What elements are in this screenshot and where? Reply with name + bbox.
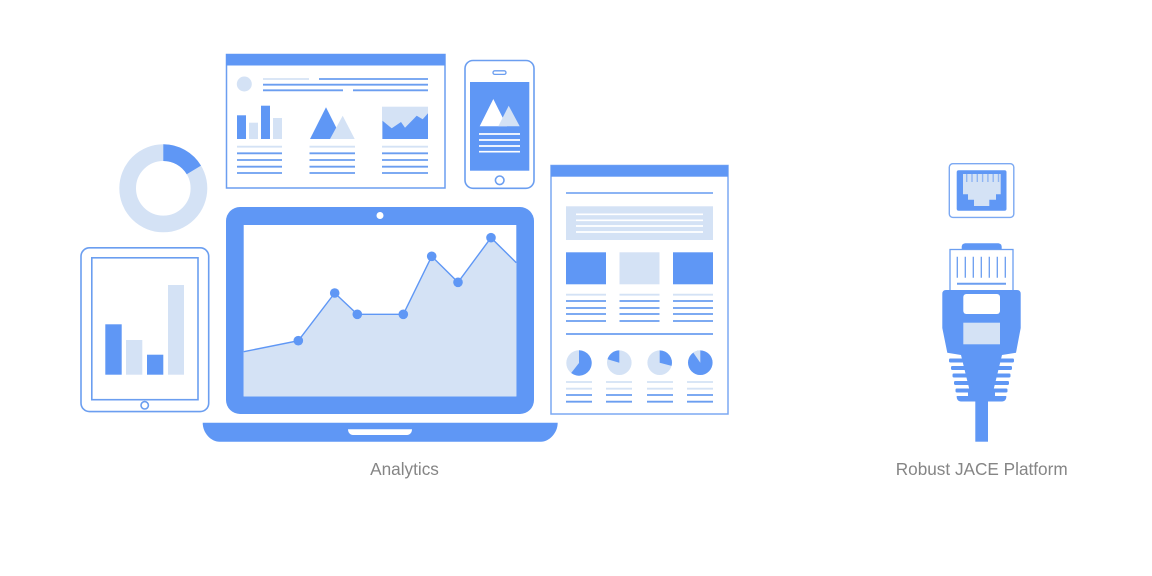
label: Analytics: Analytics	[370, 459, 439, 479]
icon: ethernet plug	[942, 243, 1021, 442]
report document panel	[551, 165, 728, 414]
laptop with line chart	[203, 207, 558, 442]
tablet with bar chart	[81, 248, 209, 412]
icon: ethernet jack	[949, 164, 1014, 217]
donut chart	[128, 144, 201, 224]
smartphone	[465, 60, 534, 188]
label: Robust JACE Platform: Robust JACE Platform	[896, 459, 1068, 479]
dashboard window panel	[226, 54, 445, 188]
